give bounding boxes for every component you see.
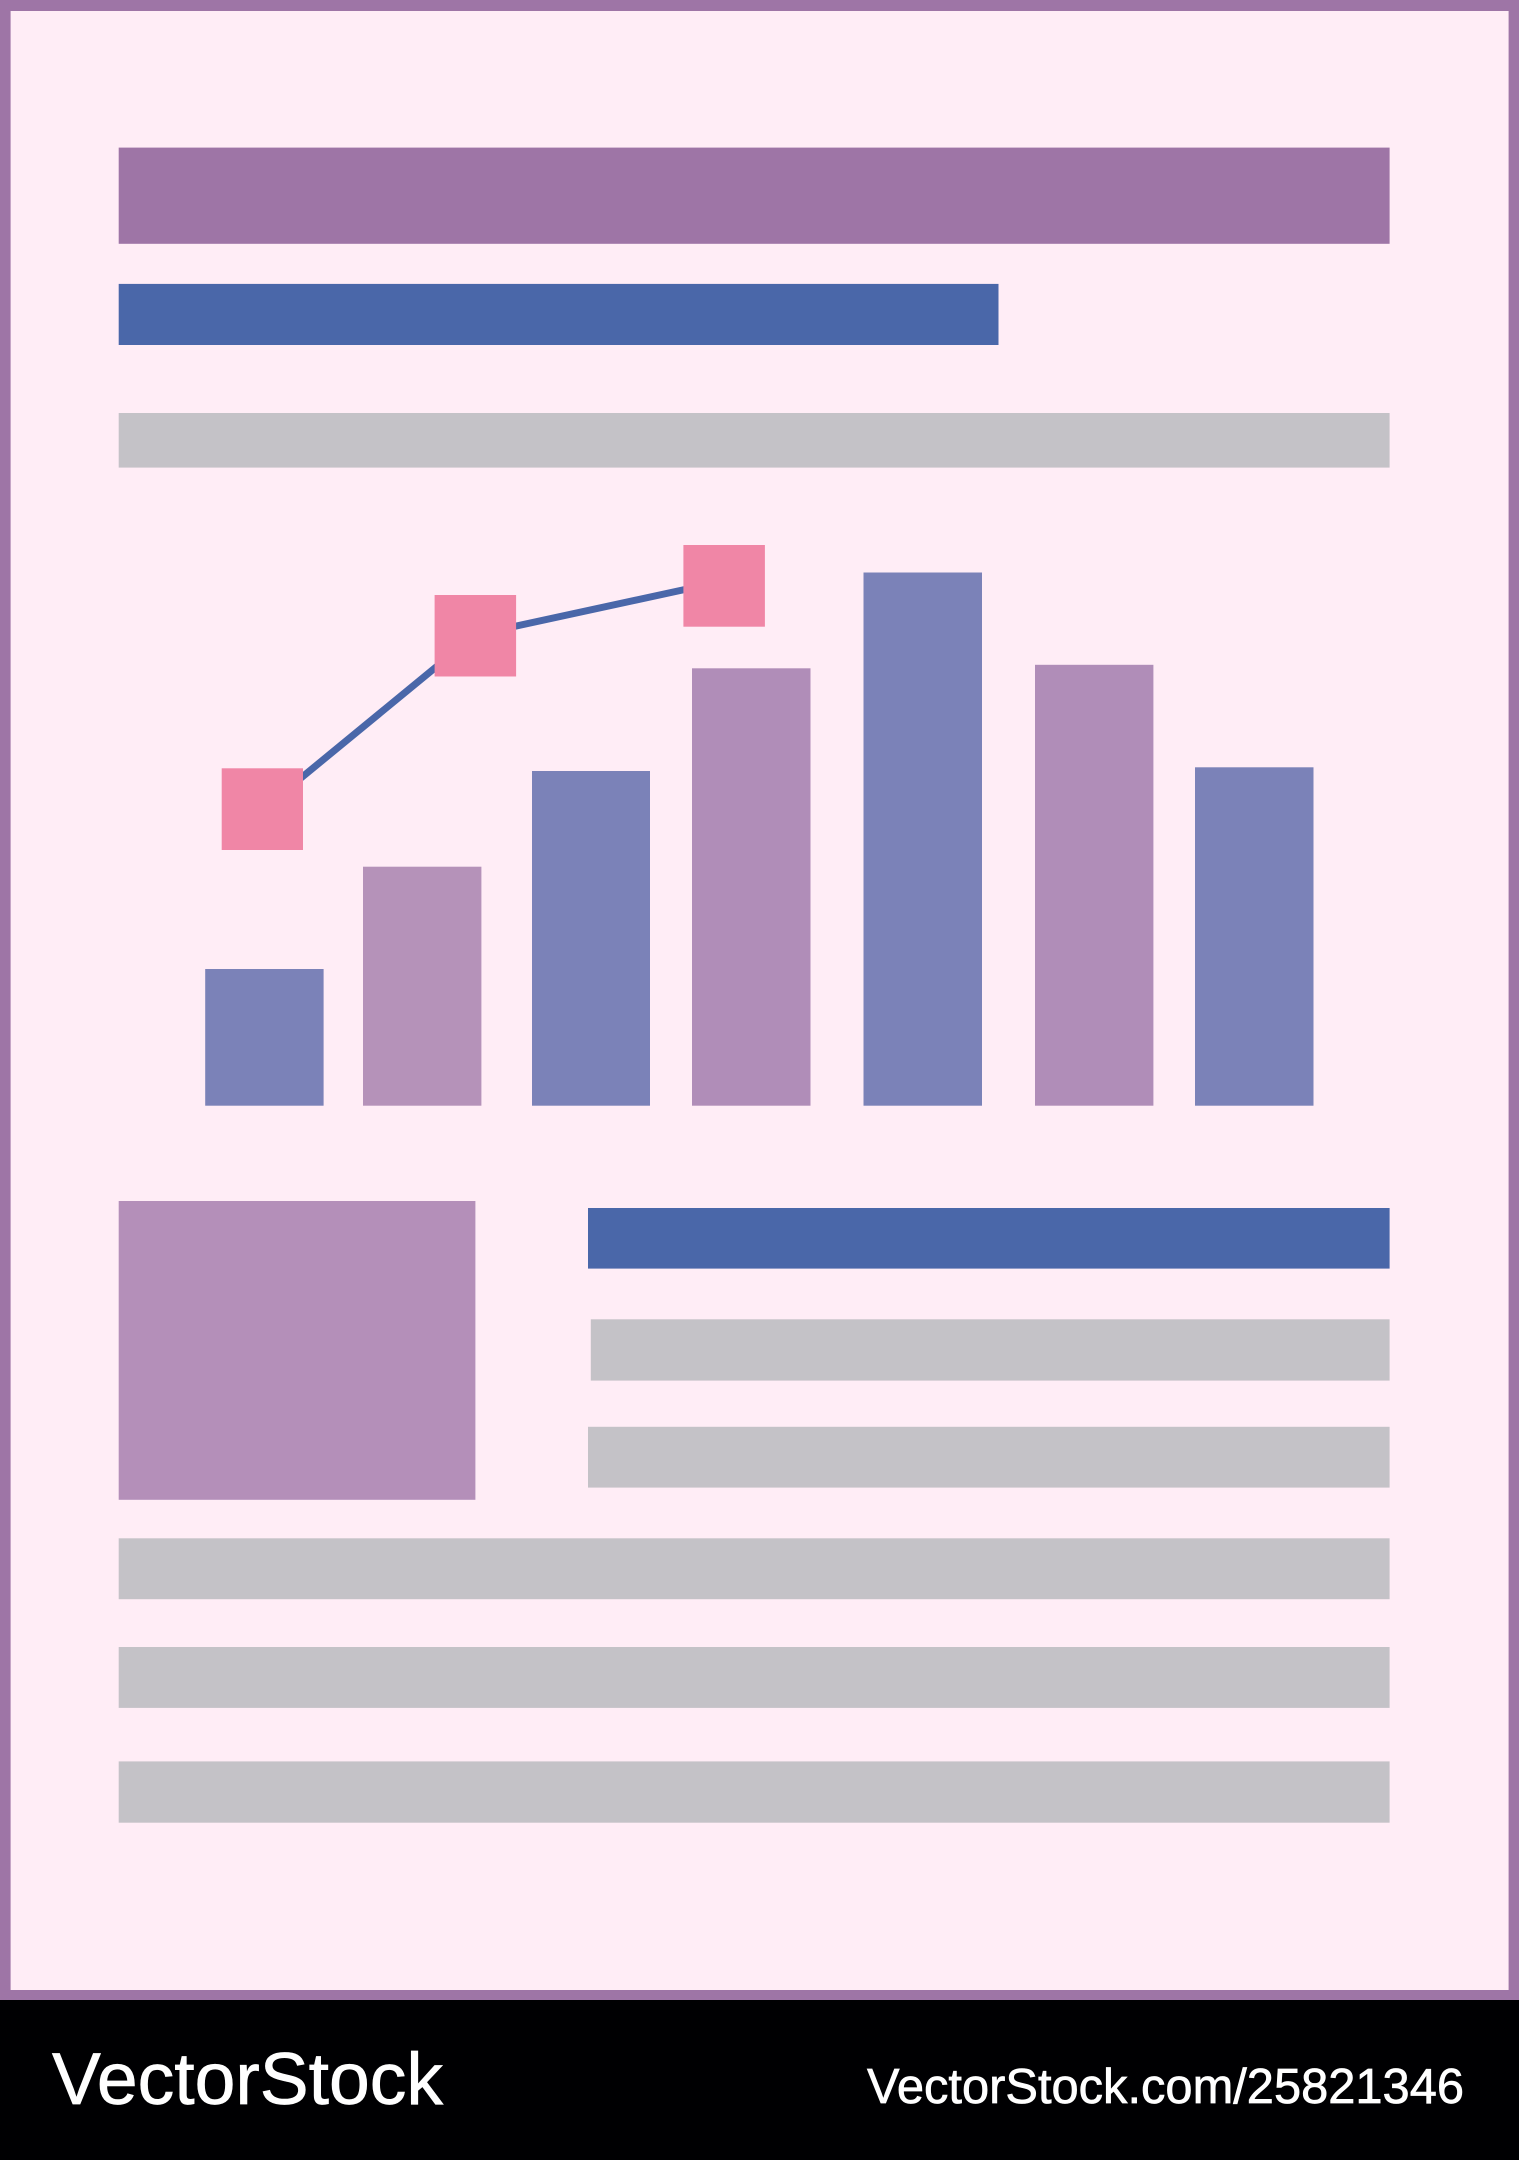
line marker 3 <box>683 545 765 627</box>
bar 4 <box>692 668 810 1106</box>
body text line 2 <box>119 1647 1390 1708</box>
title bar <box>119 148 1390 244</box>
bar 5 <box>864 572 982 1106</box>
trend line <box>262 581 724 810</box>
bar 2 <box>363 867 481 1106</box>
chart: combined bars and line <box>205 545 1314 1106</box>
body text line 3 <box>119 1761 1390 1823</box>
bar 7 <box>1195 767 1314 1106</box>
text block: side lines <box>588 1319 1390 1488</box>
intro text line <box>119 413 1390 468</box>
bar 3 <box>532 771 650 1106</box>
image placeholder block <box>119 1201 475 1500</box>
bar 1 <box>205 969 324 1106</box>
text block: full width lines <box>119 1538 1390 1823</box>
line marker 1 <box>222 768 303 850</box>
side text line 1 <box>591 1319 1390 1381</box>
line marker 2 <box>435 595 516 676</box>
section heading bar <box>588 1208 1390 1269</box>
body text line 1 <box>119 1538 1390 1599</box>
subtitle bar <box>119 284 998 345</box>
side text line 2 <box>588 1427 1390 1488</box>
watermark image URL text: VectorStock.com/25821346 <box>867 2060 1464 2114</box>
bar 6 <box>1035 665 1153 1106</box>
watermark logo text: VectorStock <box>52 2039 443 2120</box>
bar chart <box>205 572 1314 1106</box>
